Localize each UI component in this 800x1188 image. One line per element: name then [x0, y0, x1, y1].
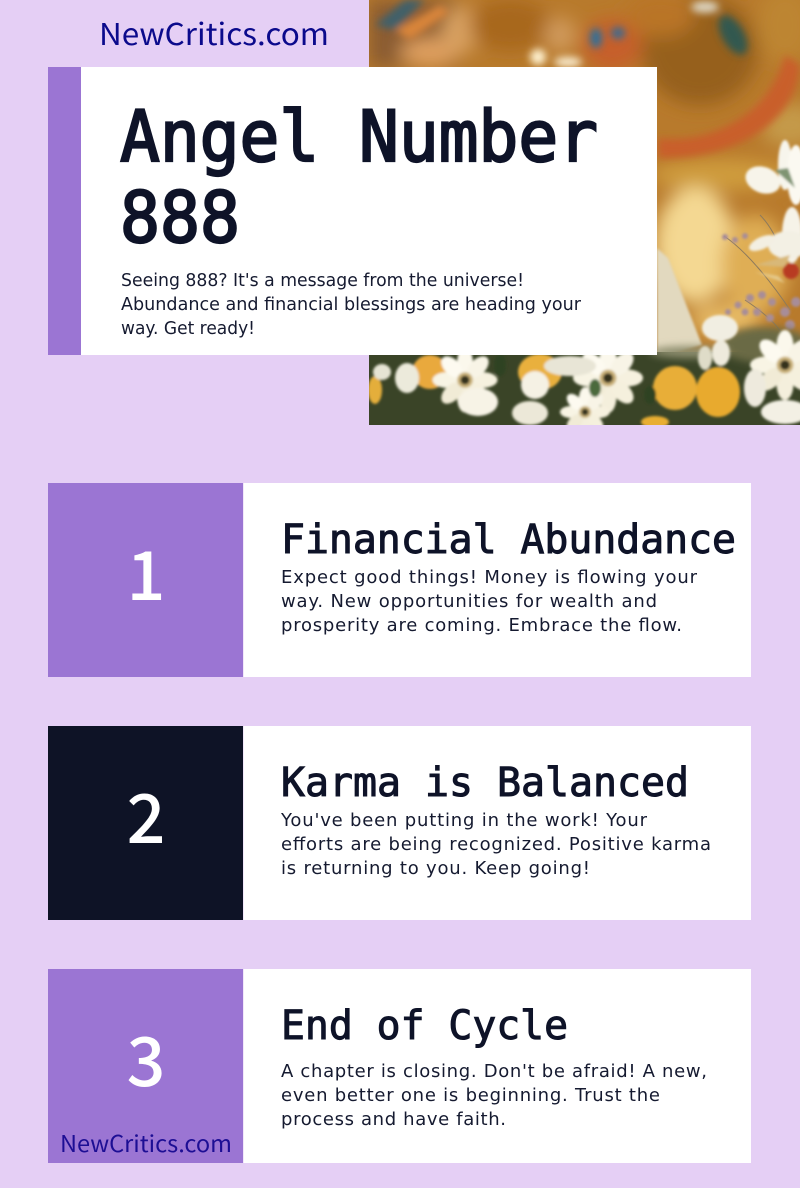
- cloth: [657, 248, 702, 358]
- body 1: way. New opportunities for wealth and: [281, 591, 657, 612]
- number block 3: [48, 969, 243, 1163]
- body 3: A chapter is closing. Don't be afraid! A new,: [281, 1061, 707, 1082]
- body 2: You've been putting in the work! Your: [280, 810, 648, 831]
- body 3: process and have faith.: [281, 1109, 506, 1130]
- card 3: [244, 969, 751, 1163]
- card 1: [244, 483, 751, 677]
- card 2: [244, 726, 751, 920]
- number 2: 2: [127, 764, 165, 863]
- number block 1: [48, 483, 243, 677]
- number block 2: [48, 726, 243, 920]
- dried flower sprigs: [724, 215, 790, 340]
- logo: bottom: NewCritics.com: [60, 1125, 232, 1159]
- header panel: [48, 67, 657, 355]
- white lilies: [742, 140, 800, 283]
- header accent bar: [48, 67, 81, 355]
- intro text: Abundance and financial blessings are heading your: [121, 294, 582, 315]
- body 3: [281, 1061, 707, 1130]
- heading 1: Financial Abundance: [281, 517, 736, 563]
- body 2: is returning to you. Keep going!: [281, 858, 590, 879]
- body 2: [280, 810, 711, 879]
- panel: item 2: [48, 726, 751, 920]
- main title: 888: [120, 177, 240, 259]
- panel: item 1: [48, 483, 751, 677]
- logo: top: NewCritics.com: [99, 10, 329, 54]
- heading 2: Karma is Balanced: [281, 760, 689, 806]
- heading 3: End of Cycle: [281, 1003, 568, 1049]
- panel: item 3: [48, 969, 751, 1163]
- main title: [120, 96, 598, 259]
- body 1: [281, 567, 698, 636]
- body 2: efforts are being recognized. Positive karma: [281, 834, 711, 855]
- body 3: even better one is beginning. Trust the: [281, 1085, 660, 1106]
- intro text: Seeing 888? It's a message from the universe!: [121, 270, 524, 291]
- intro text: way. Get ready!: [121, 318, 255, 339]
- main title: Angel Number: [120, 96, 598, 178]
- body 1: Expect good things! Money is flowing your: [281, 567, 698, 588]
- header white card: [81, 67, 657, 355]
- body 1: prosperity are coming. Embrace the flow.: [281, 615, 682, 636]
- intro text: [121, 270, 582, 339]
- photo: flowers and golden altar: [368, 0, 800, 437]
- number 1: 1: [127, 521, 165, 620]
- bouquet foliage: [369, 352, 800, 425]
- number 3: 3: [127, 1007, 165, 1106]
